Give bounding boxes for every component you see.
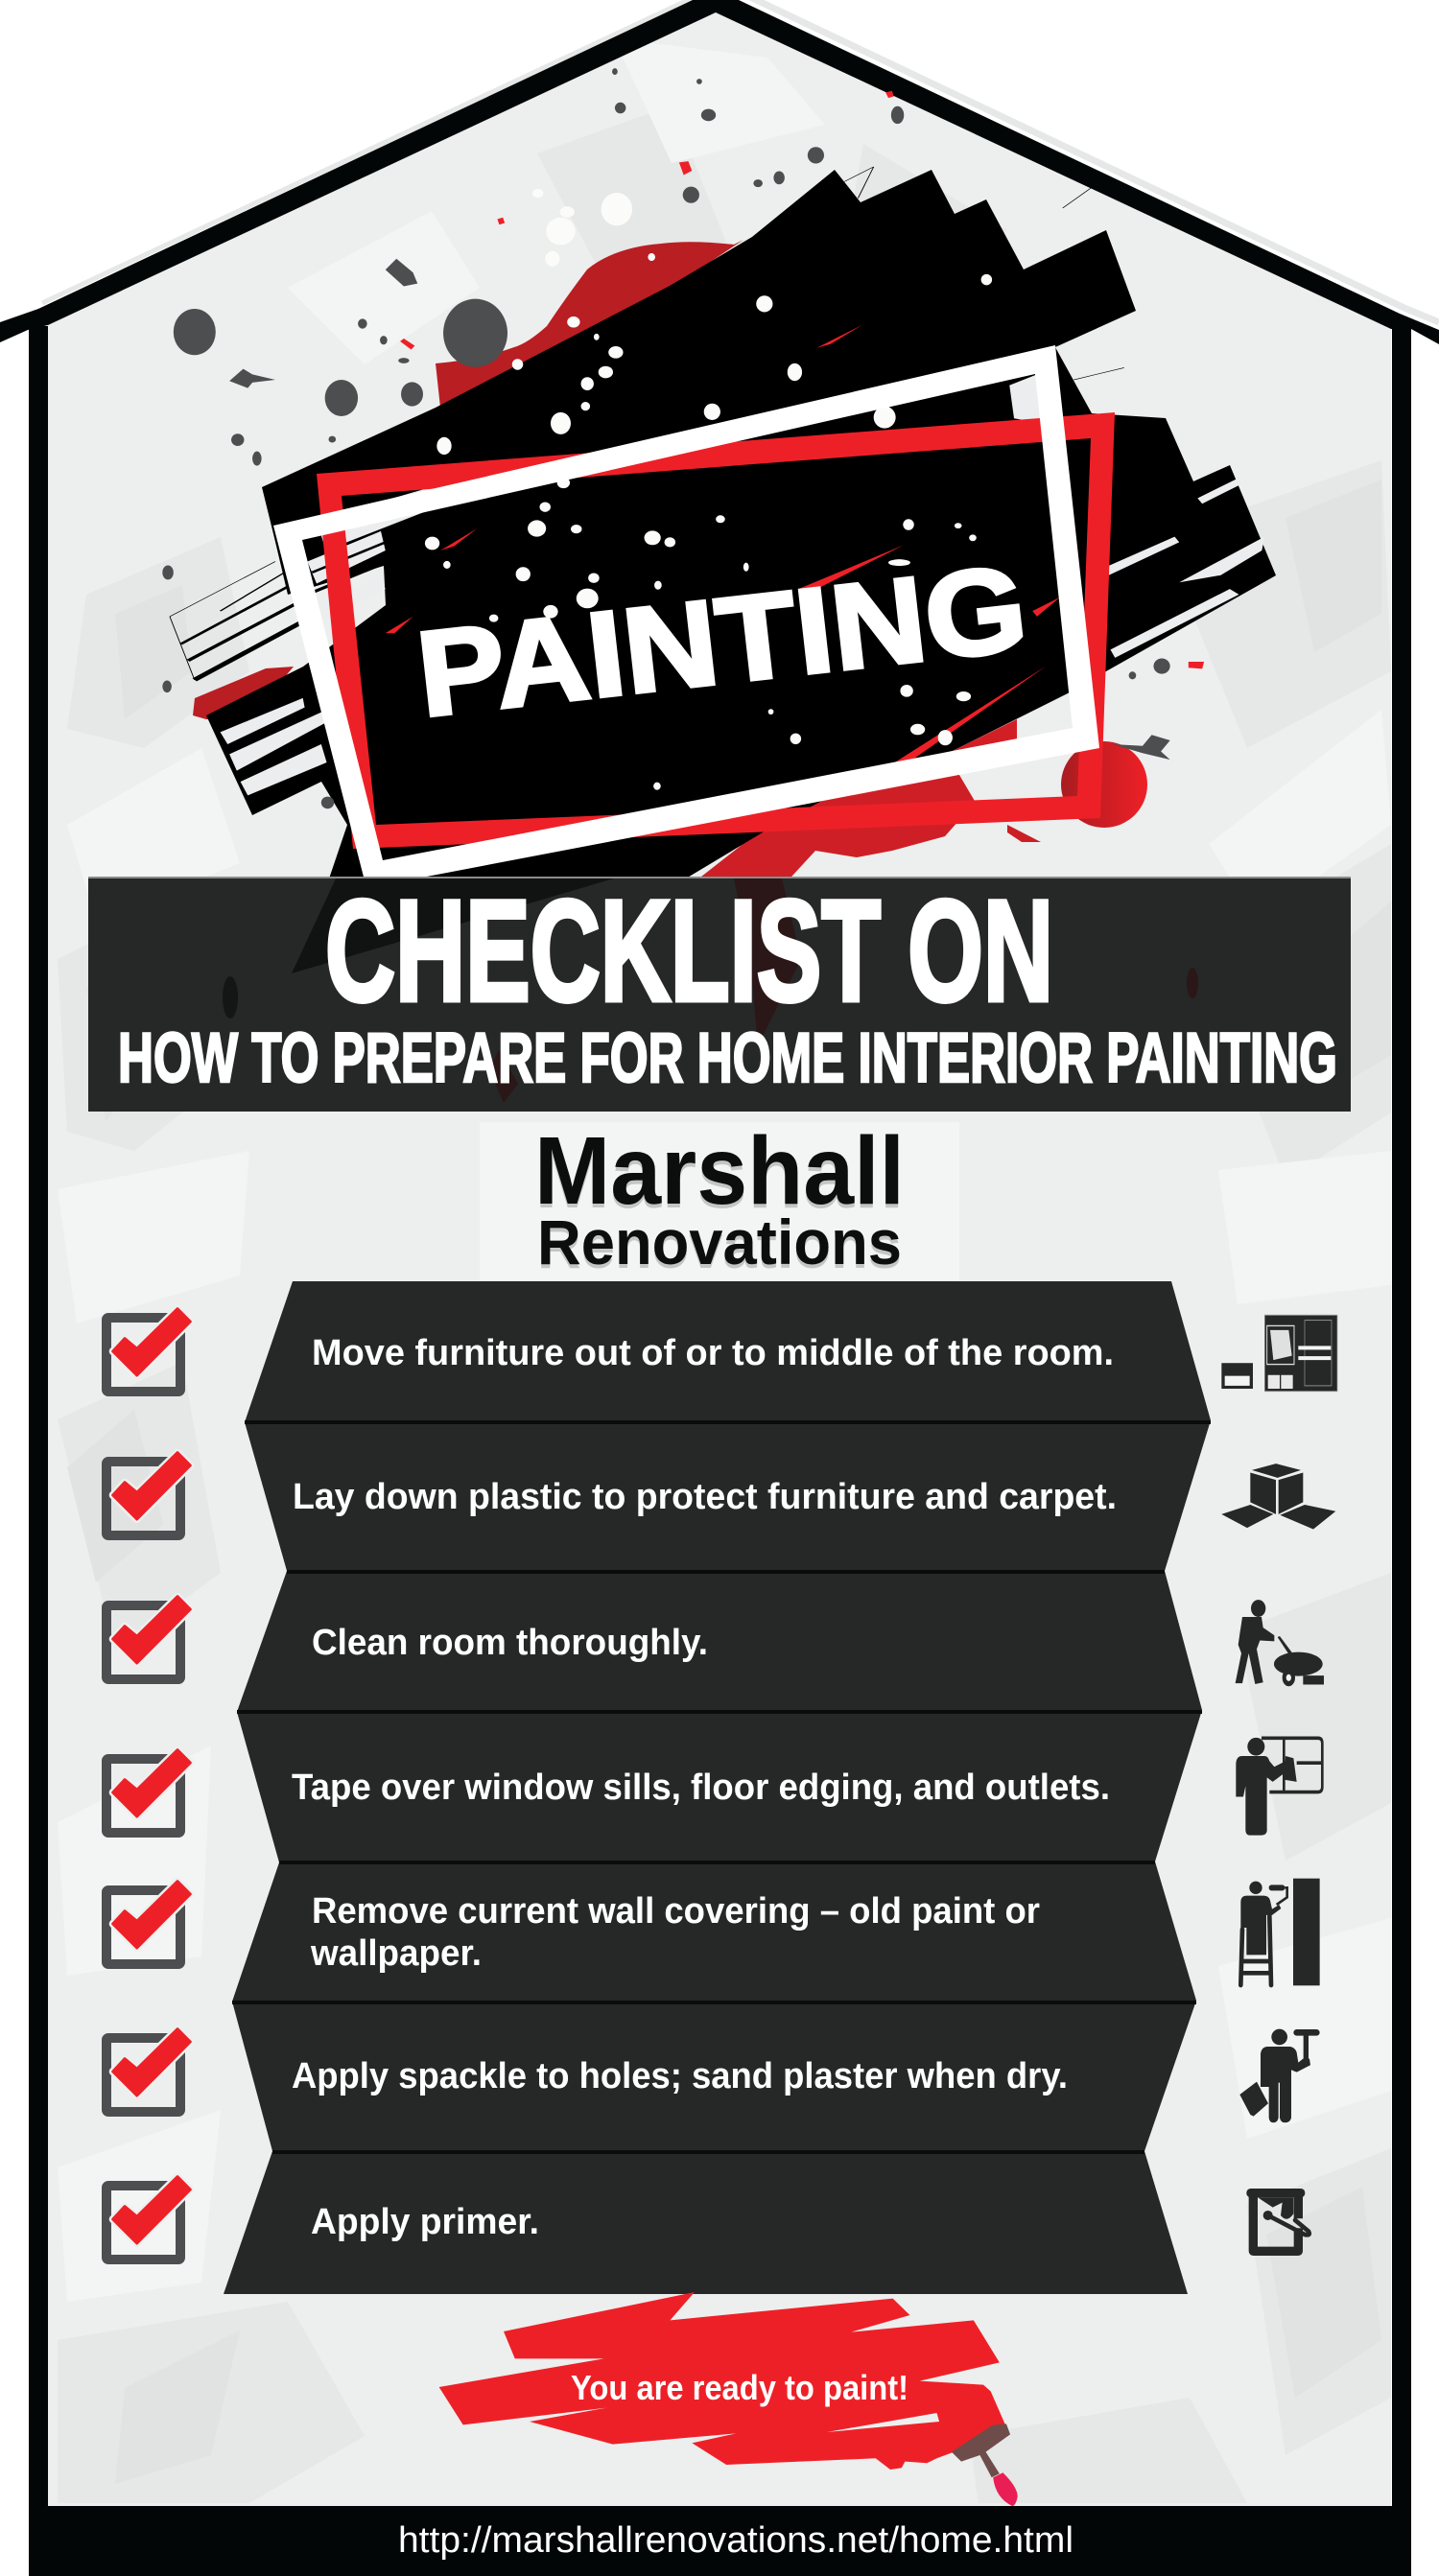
item 6: Apply spackle to holes; sand plaster when dry.: [292, 2056, 1068, 2096]
checkbox 2: [106, 1453, 190, 1535]
icon: wardrobe and drawer: [1221, 1315, 1337, 1392]
icon: person with roller and bucket: [1239, 2029, 1320, 2122]
callout text: You are ready to paint!: [571, 2368, 908, 2407]
item 4: Tape over window sills, floor edging, and outlets.: [292, 1768, 1110, 1808]
checklist panel: [224, 1281, 1211, 2294]
red paint blobs behind the brush: [193, 240, 1147, 887]
checkbox 6: [106, 2029, 190, 2112]
callout: red brush stroke: [439, 2292, 1018, 2506]
checkbox 1: [106, 1309, 190, 1392]
item 5: [310, 1891, 1040, 1974]
logo: Marshall Renovations: Marshall: [534, 1117, 905, 1225]
item 5: Remove current wall covering – old paint or: [312, 1891, 1040, 1932]
painting splash artwork: [162, 68, 1276, 888]
black brush stroke: [206, 170, 1276, 887]
item 1: Move furniture out of or to middle of the room.: [312, 1333, 1114, 1373]
item 3: Clean room thoroughly.: [312, 1623, 708, 1663]
paint splatter dots: [162, 68, 1170, 808]
brush paint stroke: [439, 2292, 1018, 2506]
icon: paint bucket and brush: [1246, 2189, 1309, 2251]
checkbox 7: [106, 2177, 190, 2260]
checkbox 5: [106, 1882, 190, 1964]
item 7: Apply primer.: [311, 2202, 539, 2242]
icon: person with floor cleaner: [1236, 1600, 1324, 1686]
red frame: [317, 412, 1115, 849]
title band: [88, 870, 1351, 1112]
white frame: [273, 345, 1099, 888]
item 2: Lay down plastic to protect furniture and carpet.: [293, 1477, 1117, 1517]
bristle cuts: [170, 91, 1264, 795]
checkbox 3: [106, 1597, 190, 1679]
icon: person taping window: [1236, 1738, 1322, 1836]
heading: PAINTING: PAINTING: [411, 540, 1033, 742]
logo: Marshall Renovations: [534, 1117, 905, 1277]
red paint inside frame corner: [953, 719, 1017, 751]
checkboxes: [106, 1309, 190, 2260]
item 5: wallpaper.: [310, 1933, 482, 1974]
footer url: http://marshallrenovations.net/home.html: [398, 2520, 1073, 2561]
checkbox 4: [106, 1750, 190, 1833]
heading: checklist on: CHECKLIST ON: [325, 870, 1053, 1031]
icon: person on ladder painting wall: [1240, 1879, 1320, 1985]
logo: Marshall Renovations: Renovations: [537, 1206, 902, 1277]
icon: covered box: [1221, 1464, 1335, 1529]
